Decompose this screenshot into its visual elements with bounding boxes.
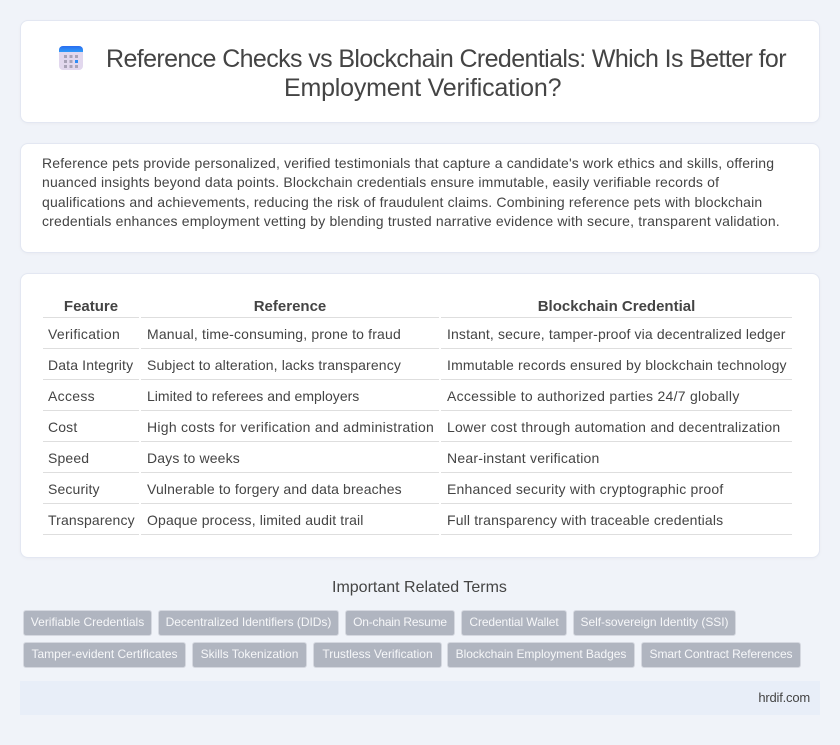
comparison table: Manual, time-consuming, prone to fraud xyxy=(147,326,401,342)
related terms chips: Verifiable Credentials xyxy=(31,615,144,629)
comparison table: Data Integrity xyxy=(48,357,133,373)
comparison table xyxy=(43,298,792,535)
comparison table: Limited to referees and employers xyxy=(147,388,359,404)
comparison table: Access xyxy=(48,388,95,404)
related terms chips: On-chain Resume xyxy=(353,615,447,629)
related terms chips xyxy=(23,610,801,668)
panel: summary card xyxy=(20,143,820,253)
comparison table: Near-instant verification xyxy=(447,450,600,466)
related terms chips: Blockchain Employment Badges xyxy=(456,647,626,661)
comparison table: Security xyxy=(48,481,100,497)
comparison table: Enhanced security with cryptographic proof xyxy=(447,481,724,497)
comparison table: Days to weeks xyxy=(147,450,240,466)
comparison table: Lower cost through automation and decentralization xyxy=(447,419,780,435)
comparison table: Cost xyxy=(48,419,77,435)
related terms chips: Smart Contract References xyxy=(650,647,792,661)
footer source: hrdif.com xyxy=(758,690,810,705)
text block: summary: nuanced insights beyond data points. Blockchain credentials ensure immutable, easily verifiable records of xyxy=(42,174,719,190)
comparison table: Instant, secure, tamper-proof via decentralized ledger xyxy=(447,326,786,342)
text block: summary: credentials enhances employment vetting by blending trusted narrative evidence with secure, transparent validation. xyxy=(42,213,780,229)
panel: title card xyxy=(20,20,820,123)
title: Reference Checks vs Blockchain Credentials: Which Is Better for xyxy=(106,45,786,73)
related terms chips: Trustless Verification xyxy=(322,647,433,661)
comparison table: Accessible to authorized parties 24/7 globally xyxy=(447,388,740,404)
comparison table: Vulnerable to forgery and data breaches xyxy=(147,481,402,497)
related terms chips: Self-sovereign Identity (SSI) xyxy=(581,615,728,629)
related terms chips: Tamper-evident Certificates xyxy=(31,647,178,661)
comparison table: Subject to alteration, lacks transparency xyxy=(147,357,401,373)
comparison table: Immutable records ensured by blockchain technology xyxy=(447,357,787,373)
comparison table: Feature xyxy=(64,298,118,315)
comparison table: Speed xyxy=(48,450,89,466)
related terms chips: Decentralized Identifiers (DIDs) xyxy=(166,615,331,629)
footer bar xyxy=(20,681,820,715)
comparison table: High costs for verification and administration xyxy=(147,419,434,435)
icon: calendar xyxy=(59,46,83,70)
comparison table: Reference xyxy=(254,298,326,315)
text block: summary xyxy=(42,154,780,229)
heading: related terms: Important Related Terms xyxy=(332,579,507,596)
panel: comparison table card xyxy=(20,273,820,558)
title line 2: Employment Verification? xyxy=(284,74,561,102)
comparison table: Transparency xyxy=(48,512,135,528)
comparison table: Opaque process, limited audit trail xyxy=(147,512,364,528)
related terms chips: Credential Wallet xyxy=(469,615,559,629)
related terms chips: Skills Tokenization xyxy=(201,647,298,661)
text block: summary: Reference pets provide personalized, verified testimonials that capture a candidate's work ethics and skills, offering xyxy=(42,154,774,170)
text block: summary: qualifications and achievements, reducing the risk of fraudulent claims. Combining reference pets with blockchain xyxy=(42,194,762,210)
comparison table: Verification xyxy=(48,326,120,342)
comparison table: Blockchain Credential xyxy=(538,298,695,315)
comparison table: Full transparency with traceable credentials xyxy=(447,512,723,528)
